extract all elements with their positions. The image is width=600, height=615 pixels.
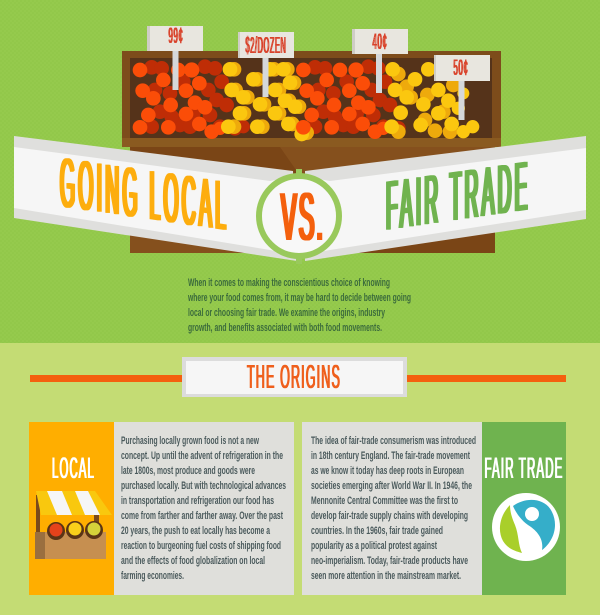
intro paragraph [187, 277, 411, 334]
text: fair trade origins: Mennonite Central Committee was the first to [311, 495, 458, 507]
text: local origins: Purchasing locally grown food is not a new [121, 435, 259, 447]
heading: going local: GOING LOCAL [60, 142, 229, 245]
panel: local: LOCAL [52, 452, 95, 485]
text: local origins: in transportation and refrigeration our food has [121, 495, 274, 507]
background: origins section [0, 343, 600, 615]
text: fair trade origins: countries. In the 1960s, fair trade gained [311, 525, 443, 537]
versus badge [259, 169, 339, 264]
price sign: 40 cents: 40¢ [372, 29, 388, 54]
text: local origins: purchased locally. But with technological advances [121, 480, 286, 492]
text: local origins: late 1800s, most produce and goods were [121, 465, 255, 477]
text: local origins: come from farther and farther away. Over the past [121, 510, 283, 522]
text: local origins [121, 435, 286, 582]
text: $2/DOZEN [246, 32, 286, 58]
text: fair trade origins: seen more attention in the mainstream market. [311, 570, 461, 582]
text: fair trade origins: societies emerging after World War II. In 1946, the [311, 480, 472, 492]
text: fair trade origins: popularity as a political protest against [311, 540, 437, 552]
text: fair trade origins: as we know it today has deep roots in European [311, 465, 464, 477]
text: local origins: reaction to burgeoning fuel costs of shipping food [121, 540, 281, 552]
price sign: $2/dozen [238, 32, 294, 97]
intro paragraph: When it comes to making the conscientious choice of knowing [188, 277, 390, 289]
text: fair trade origins: develop fair-trade supply chains with developing [311, 510, 468, 522]
heading: fair trade: FAIR TRADE [386, 146, 531, 245]
intro paragraph: where your food comes from, it may be hard to decide between going [187, 292, 411, 304]
fruit: oranges and lemons [133, 59, 479, 141]
section banner: the origins: THE ORIGINS [247, 358, 341, 395]
price sign: 40 cents [352, 29, 408, 93]
text: local origins: farming economies. [121, 570, 184, 582]
panel: local [29, 422, 294, 595]
intro paragraph: growth, and benefits associated with both food movements. [188, 322, 382, 334]
text: fair trade origins: neo-imperialism. Today, fair-trade products have [311, 555, 468, 567]
icon: market stall [35, 491, 112, 559]
price sign: 99 cents [147, 23, 203, 90]
banner: going local [14, 136, 297, 261]
panel: fair trade [302, 422, 566, 595]
text: local origins: concept. Up until the advent of refrigeration in the [121, 450, 283, 462]
fruit crate illustration [122, 51, 501, 253]
text: VS. [281, 179, 325, 255]
icon: fair trade logo [492, 493, 560, 561]
background: top green section [0, 0, 600, 343]
text: fair trade origins [311, 435, 476, 582]
price sign: 50 cents: 50¢ [454, 55, 468, 80]
banner: fair trade [302, 136, 586, 261]
text: fair trade origins: The idea of fair-trade consumerism was introduced [311, 435, 476, 447]
price sign: 50 cents [434, 55, 490, 120]
price sign: 99 cents: 99¢ [168, 23, 184, 48]
intro paragraph: local or choosing fair trade. We examine the origins, industry [188, 307, 386, 319]
text: fair trade origins: in 18th century England. The fair-trade movement [311, 450, 470, 462]
text: local origins: and the effects of food globalization on local [121, 555, 265, 567]
section banner: the origins [30, 357, 566, 397]
text: local origins: 20 years, the push to eat locally has become a [121, 525, 271, 537]
